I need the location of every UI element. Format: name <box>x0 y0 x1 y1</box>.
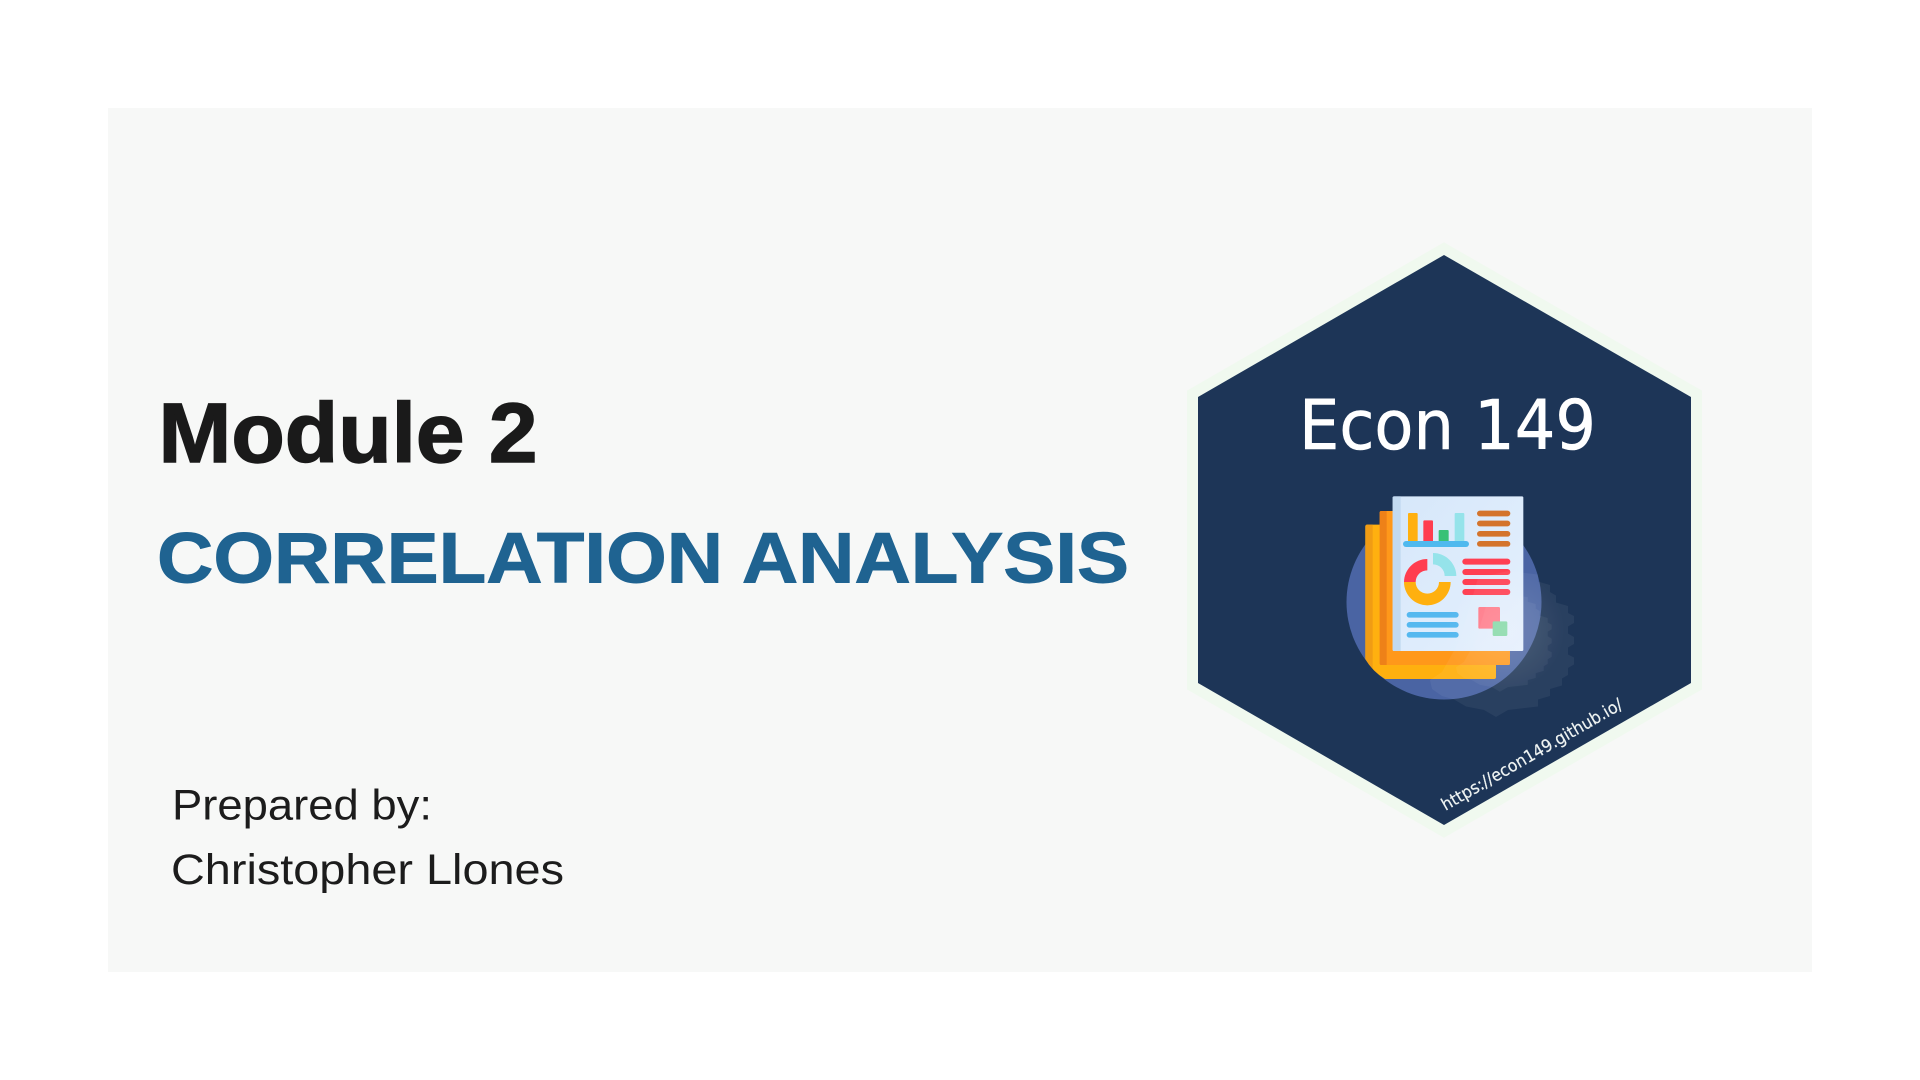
icon: report document stack <box>1365 496 1523 679</box>
panel: card background <box>108 108 1812 972</box>
squares <box>1478 607 1507 636</box>
heading: Module 2: Module 2 <box>158 386 538 480</box>
front page <box>1393 496 1523 651</box>
text block: author credit <box>171 782 564 894</box>
text lines: red <box>1462 559 1510 595</box>
subheading: Correlation Analysis: CORRELATION ANALYSIS <box>157 520 1129 598</box>
badge url: https://econ149.github.io/ <box>1438 695 1627 815</box>
icon: circle backdrop <box>1346 504 1542 700</box>
icon: light glow <box>1430 570 1574 717</box>
text lines: blue <box>1407 612 1459 638</box>
text block: author credit: Christopher Llones <box>171 846 564 894</box>
middle page <box>1380 511 1510 665</box>
hexagon shape <box>1198 255 1691 825</box>
back page <box>1365 525 1496 679</box>
donut chart <box>1404 553 1456 605</box>
text lines: brown <box>1477 511 1510 547</box>
badge title: Econ 149: Econ 149 <box>1299 386 1596 466</box>
text block: author credit: Prepared by: <box>172 782 432 830</box>
bar chart <box>1403 513 1469 547</box>
badge: Econ 149 hexagon logo <box>1198 255 1691 825</box>
